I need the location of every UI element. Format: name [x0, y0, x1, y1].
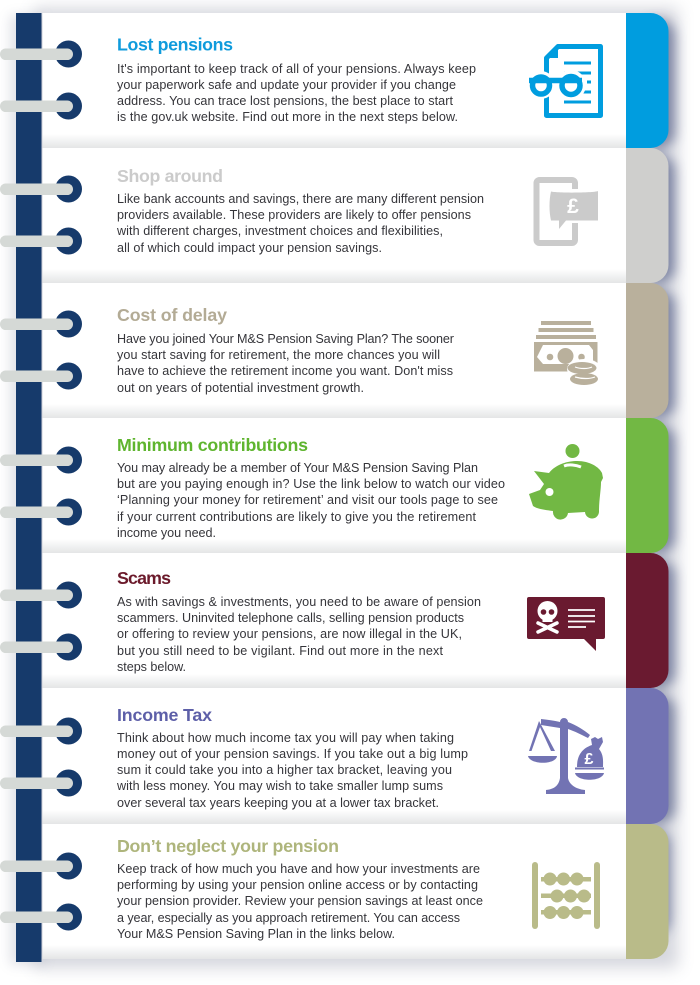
icon: scales with money bag: [528, 718, 604, 794]
body text: scams: but you still need to be vigilant. Find out more in the next: [117, 644, 444, 658]
colour tab: maroon: [626, 553, 668, 688]
colour tab: blue: [626, 13, 668, 148]
body text: scams: scammers. Uninvited telephone calls, selling pension products: [117, 611, 464, 625]
body text: shop around: all of which could impact your pension savings.: [117, 241, 382, 255]
body text: minimum contributions: You may already be a member of Your M&S Pension Saving Plan: [117, 461, 478, 475]
body text: scams: As with savings & investments, you need to be aware of pension: [117, 595, 481, 609]
body text: don't neglect your pension: [117, 862, 483, 941]
body text: cost of delay: have to achieve the retirement income you want. Don't miss: [117, 364, 453, 378]
heading: minimum contributions: Minimum contributions: [117, 435, 308, 455]
body text: cost of delay: [117, 332, 454, 395]
icon: piggy bank: [529, 444, 603, 520]
body text: income tax: with less money. You may wish to take smaller lump sums: [116, 779, 443, 793]
body text: lost pensions: is the gov.uk website. Find out more in the next steps below.: [117, 110, 458, 124]
icon: skull warning speech bubble: [527, 597, 605, 651]
spiral rings: [0, 40, 82, 930]
heading: lost pensions: Lost pensions: [117, 34, 233, 54]
panel: don't neglect your pension: [42, 824, 668, 959]
colour tab: grey: [626, 148, 668, 283]
body text: income tax: over several tax years keeping you at a lower tax bracket.: [117, 796, 439, 810]
icon: abacus: [532, 862, 600, 929]
panel: scams: [42, 553, 668, 688]
body text: scams: steps below.: [117, 660, 186, 674]
body text: shop around: Like bank accounts and savings, there are many different pension: [117, 192, 484, 206]
body text: shop around: [116, 192, 484, 255]
panel: income tax: [42, 688, 668, 824]
icon: scales with money bag: £: [585, 751, 594, 768]
heading: don't neglect your pension: Don’t neglect your pension: [117, 836, 339, 856]
icon: banknotes and coins: [534, 321, 601, 385]
heading: cost of delay: Cost of delay: [117, 305, 227, 325]
body text: lost pensions: [117, 62, 476, 124]
panel: lost pensions: [42, 13, 668, 148]
icon: phone with pound bubble: £: [567, 195, 579, 218]
body text: minimum contributions: [117, 461, 505, 540]
body text: minimum contributions: but are you paying enough in? Use the link below to watch our video: [117, 477, 505, 491]
body text: cost of delay: Have you joined Your M&S Pension Saving Plan? The sooner: [117, 332, 454, 346]
body text: shop around: with different charges, investment choices and flexibilities,: [116, 224, 443, 238]
colour tab: taupe: [626, 283, 668, 418]
body text: scams: [117, 595, 481, 674]
heading: income tax: Income Tax: [117, 705, 212, 725]
body text: income tax: [116, 731, 468, 810]
body text: income tax: Think about how much income tax you will pay when taking: [117, 731, 454, 745]
notebook spine: [16, 13, 42, 962]
body text: lost pensions: It's important to keep track of all of your pensions. Always keep: [117, 62, 476, 76]
body text: cost of delay: out on years of potential investment growth.: [117, 381, 364, 395]
colour tab: green: [626, 418, 668, 553]
colour tab: olive: [626, 824, 668, 959]
body text: minimum contributions: income you need.: [117, 526, 216, 540]
panel: shop around: [42, 148, 668, 283]
body text: scams: or offering to review your pensions, are now illegal in the UK,: [117, 627, 462, 641]
icon: phone with pound bubble: [536, 180, 600, 243]
body text: don't neglect your pension: your pension provider. Review your pension savings at least once: [117, 894, 483, 908]
body text: minimum contributions: ‘Planning your money for retirement’ and visit our tools page to see: [117, 493, 498, 507]
panel: cost of delay: [42, 283, 668, 418]
body text: lost pensions: address. You can trace lost pensions, the best place to start: [117, 94, 454, 108]
body text: lost pensions: your paperwork safe and update your provider if you change: [117, 78, 456, 92]
body text: income tax: money out of your pension savings. If you take out a big lump: [117, 747, 468, 761]
body text: don't neglect your pension: Keep track of how much you have and how your investments are: [117, 862, 480, 876]
body text: income tax: sum it could take you into a higher tax bracket, leaving you: [117, 763, 452, 777]
body text: don't neglect your pension: a year, especially as you approach retirement. You can access: [117, 911, 460, 925]
body text: cost of delay: you start saving for retirement, the more chances you will: [117, 348, 440, 362]
body text: don't neglect your pension: Your M&S Pension Saving Plan in the links below.: [117, 927, 395, 941]
heading: shop around: Shop around: [117, 166, 223, 186]
colour tab: purple: [626, 688, 668, 824]
body text: minimum contributions: if your current contributions are likely to give you the retirement: [117, 510, 476, 524]
icon: document with glasses: [527, 44, 600, 116]
body text: shop around: providers available. These providers are likely to offer pensions: [117, 208, 471, 222]
panel: minimum contributions: [42, 418, 668, 553]
heading: scams: Scams: [117, 568, 171, 588]
body text: don't neglect your pension: performing by using your pension online access or by contacting: [117, 878, 478, 892]
